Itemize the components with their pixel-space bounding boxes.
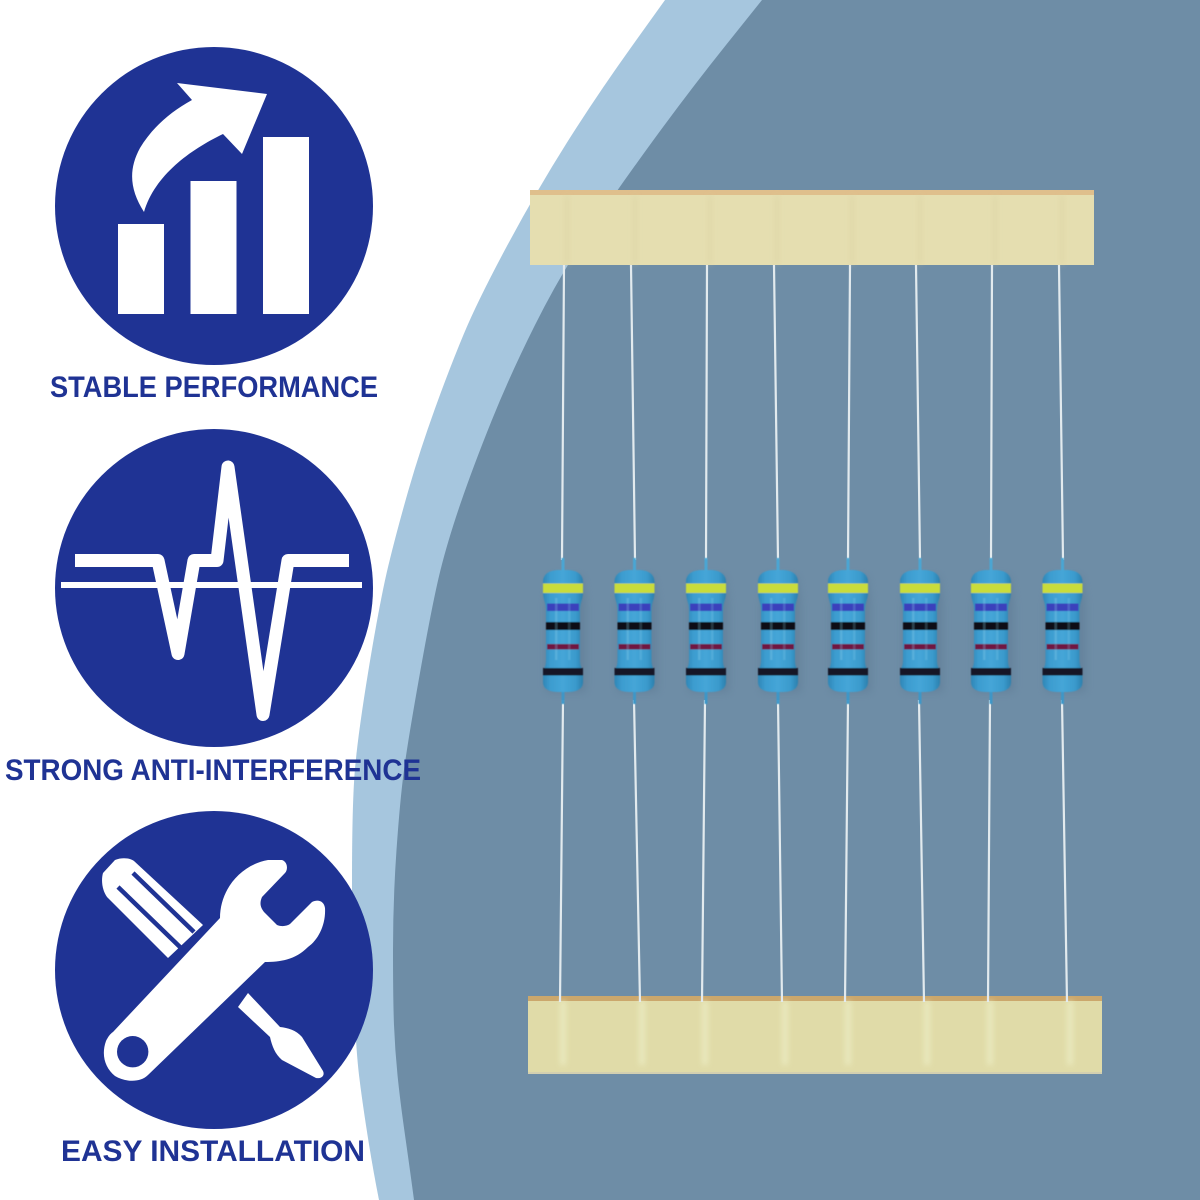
- heading: strong anti-interference: STRONG ANTI-INTERFERENCE: [5, 754, 421, 787]
- resistor 3: [686, 558, 729, 704]
- icon: wrench and screwdriver badge: [55, 811, 373, 1129]
- resistor 7: [971, 558, 1014, 704]
- resistor 4: [758, 558, 801, 704]
- resistor 5: [828, 558, 871, 704]
- top paper tape: [530, 190, 1094, 265]
- slate blue curved panel: [393, 0, 1200, 1200]
- icon: signal waveform badge: [55, 429, 373, 747]
- resistor 1: [543, 558, 586, 704]
- lead wires: [560, 265, 1067, 1002]
- light blue curved band: [352, 0, 1200, 1200]
- heading: stable performance: STABLE PERFORMANCE: [50, 371, 378, 404]
- resistor 8: [1042, 558, 1086, 704]
- resistor 6: [900, 558, 943, 704]
- icon: rising bar chart badge: [55, 47, 373, 365]
- heading: easy installation: EASY INSTALLATION: [61, 1135, 365, 1168]
- bottom paper tape: [528, 996, 1102, 1074]
- resistor 2: [614, 558, 658, 704]
